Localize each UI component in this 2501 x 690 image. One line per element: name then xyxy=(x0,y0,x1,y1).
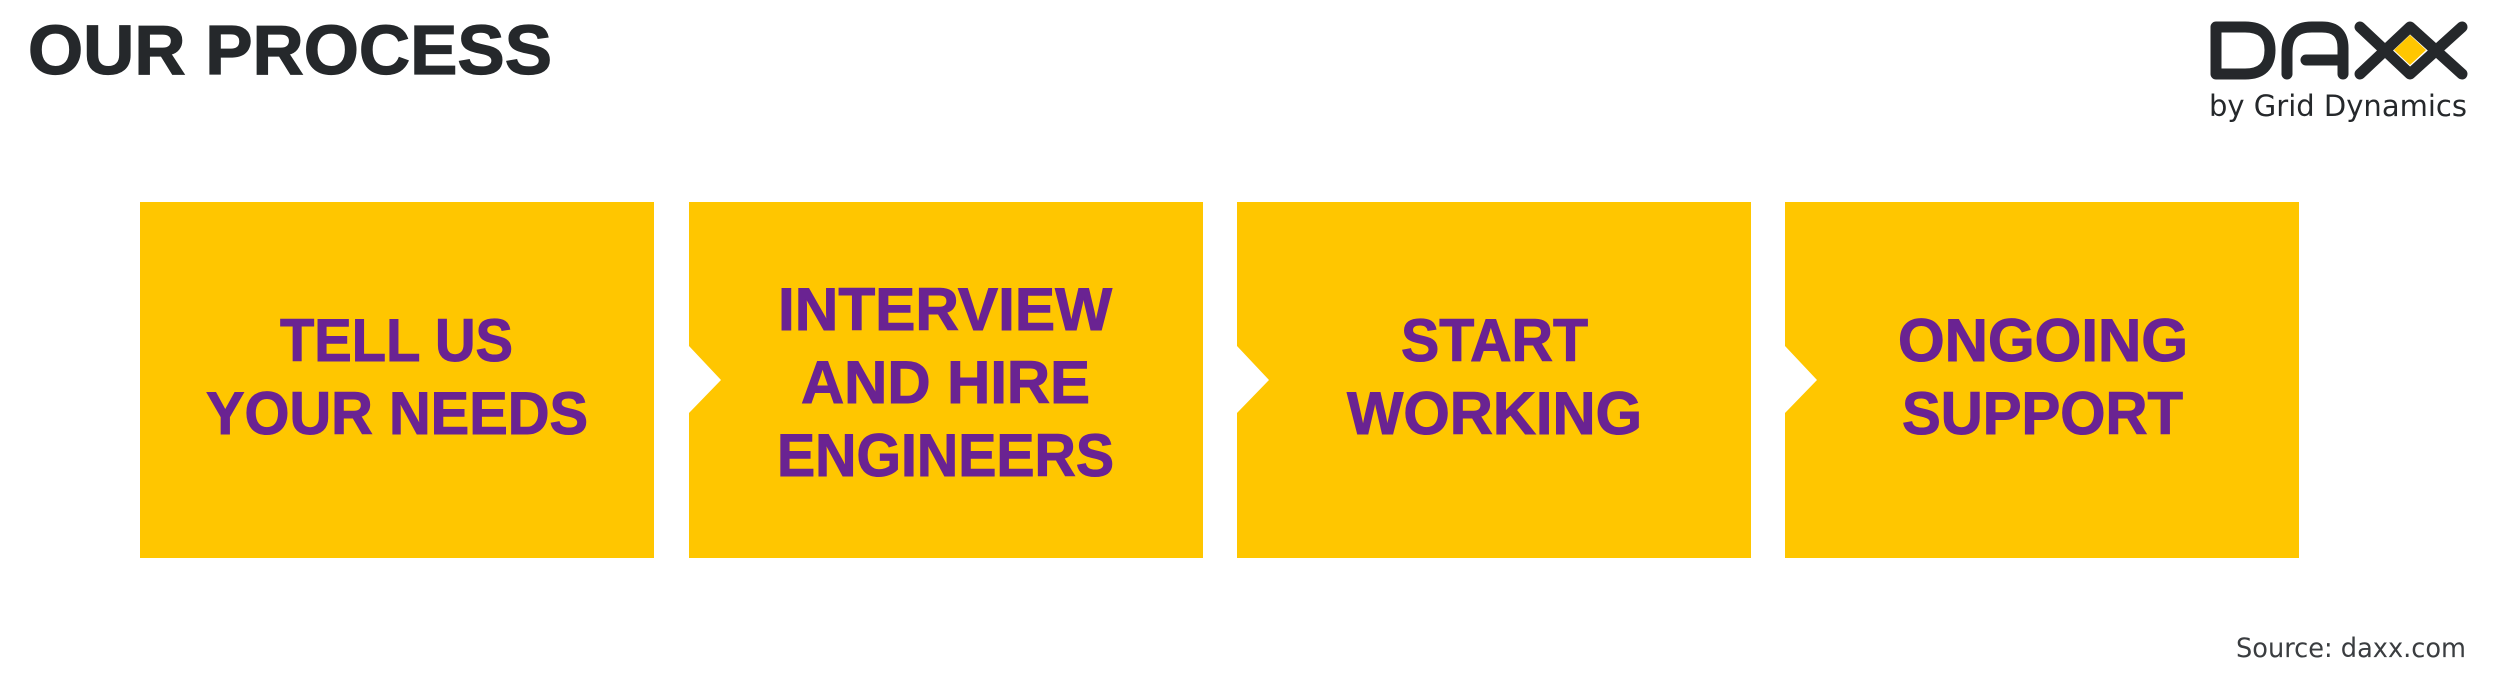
step 3: start working: WORKING xyxy=(1347,380,1642,447)
step 3: start working: START xyxy=(1401,307,1588,374)
logo diamond xyxy=(2394,35,2426,65)
step 4: ongoing support xyxy=(1785,202,2299,558)
step 4: ongoing support: ONGOING xyxy=(1898,307,2188,374)
step 2: interview and hire engineers xyxy=(689,202,1203,558)
logo tagline: by Grid Dynamics xyxy=(2209,89,2467,123)
source note: Source: daxx.com xyxy=(2236,633,2466,664)
step 2: interview and hire engineers: INTERVIEW xyxy=(778,276,1112,343)
title: OUR PROCESS xyxy=(28,11,552,89)
logo wordmark xyxy=(2216,27,2462,74)
logo: Daxx by Grid Dynamics xyxy=(2209,27,2467,123)
step 2: interview and hire engineers: AND HIRE xyxy=(801,349,1090,416)
step 1: tell us your needs: YOUR NEEDS xyxy=(206,380,588,447)
step 4: ongoing support: SUPPORT xyxy=(1902,380,2183,447)
step 1: tell us your needs xyxy=(140,202,654,558)
step 3: start working xyxy=(1237,202,1751,558)
step 1: tell us your needs: TELL US xyxy=(280,307,513,374)
step 2: interview and hire engineers: ENGINEERS xyxy=(777,422,1114,489)
